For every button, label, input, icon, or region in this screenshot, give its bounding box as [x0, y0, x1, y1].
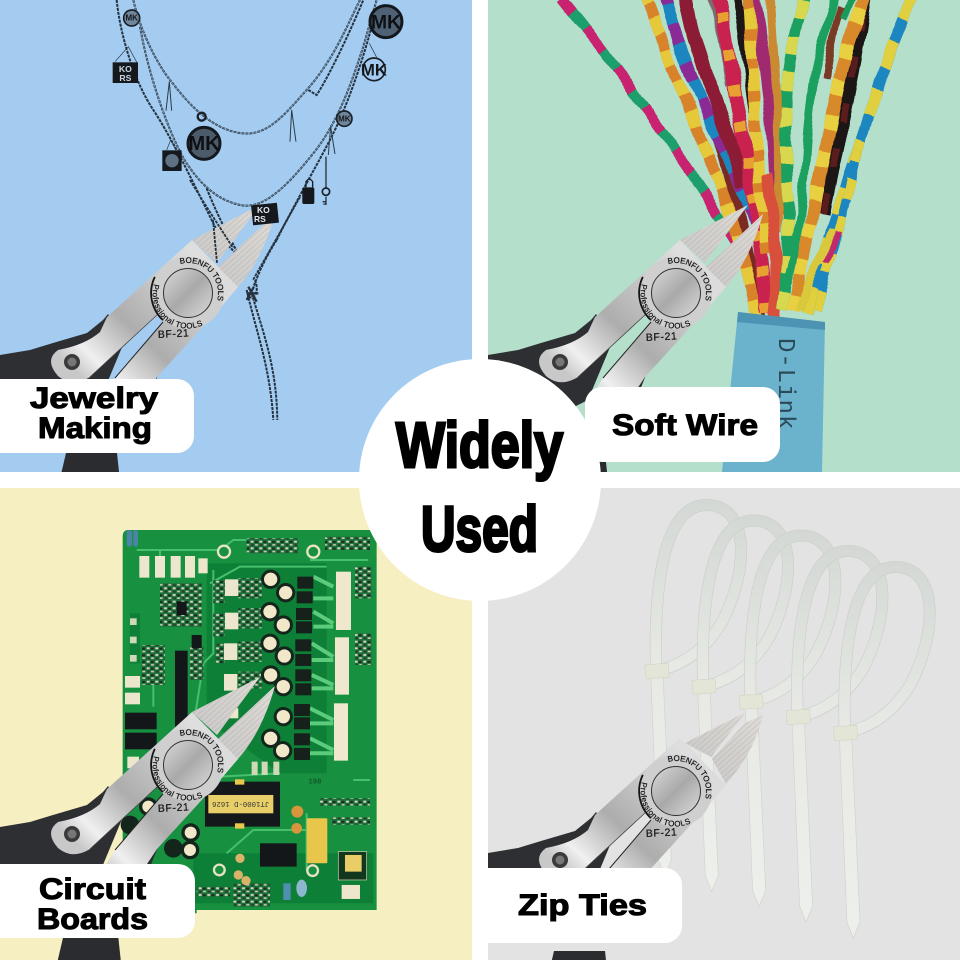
center circle heading: Widely Used: [359, 359, 601, 601]
panel: soft wire: [488, 0, 960, 472]
small resistors rows: [130, 618, 279, 775]
pliers: BF-21: [158, 801, 190, 815]
cable sheath with D-Link print: [722, 312, 825, 472]
pendant: square tag: [162, 140, 182, 171]
MOSFET transistors: [294, 577, 313, 760]
pendant: lock: [302, 179, 314, 204]
label: Soft Wire: [585, 387, 780, 462]
cable sheath with D-Link print: D-Link: [771, 338, 798, 430]
label: Circuit Boards: [0, 864, 195, 938]
pliers: BOENFU TOOLS: [180, 729, 224, 773]
center circle heading: Widely Used: Widely: [396, 409, 563, 481]
pliers: [0, 180, 301, 472]
pendant: MK ring: [361, 43, 387, 81]
label: Soft Wire: Soft Wire: [612, 409, 758, 442]
panel: zip ties: [488, 488, 960, 960]
pendant: KORS tag left: RS: [119, 73, 132, 83]
panel background blue: [0, 0, 472, 472]
label: Circuit Boards: Circuit: [39, 873, 146, 906]
pendant: small MK disc: MK: [338, 114, 351, 123]
small SMD component clusters: [142, 537, 372, 907]
label: Jewelry Making: Jewelry: [30, 382, 158, 415]
pliers: RS: [254, 214, 266, 224]
green circuit board: 198: [308, 778, 322, 786]
pendant: small MK disc: [337, 111, 352, 126]
panel background yellow: [0, 488, 472, 960]
mounting holes: [214, 546, 319, 876]
black header and relays: [125, 602, 297, 867]
transformer: [205, 779, 280, 829]
label: Jewelry Making: [0, 379, 194, 453]
pendant: KORS tag left: KO: [119, 64, 132, 74]
pendant: key: [322, 157, 330, 205]
pliers: [488, 712, 763, 960]
long terminal connectors: [334, 572, 351, 761]
pliers: BOENFU TOOLS: [180, 257, 224, 301]
pendant: tassels: [166, 82, 335, 155]
pliers: Professional TOOLS: [640, 284, 690, 329]
white connectors top-left: [125, 556, 360, 899]
label: Zip Ties: [468, 868, 682, 943]
five zip ties: [645, 505, 930, 938]
pliers: BOENFU TOOLS: [668, 257, 712, 301]
pendant: KORS tag left: [113, 47, 138, 83]
pendant: large MK circle: MK: [188, 133, 220, 155]
green circuit board: [121, 530, 377, 913]
pliers: BF-21: [646, 330, 678, 344]
panel: circuit boards: [0, 488, 472, 960]
pendant: small circle: [124, 10, 140, 26]
jewelry necklace: [113, 0, 402, 420]
label: Circuit Boards: Boards: [37, 903, 148, 936]
yellow capacitor and lower parts: [127, 530, 367, 900]
pliers: Professional TOOLS: [152, 756, 202, 801]
pliers: Professional TOOLS: [640, 782, 690, 827]
label: Jewelry Making: Making: [38, 412, 152, 445]
pliers: [488, 205, 763, 472]
transformer: JT1000-D 1626: [212, 799, 269, 807]
panel background green: [488, 0, 960, 472]
panel: jewelry making: [0, 0, 472, 472]
pliers: Professional TOOLS: [152, 284, 202, 329]
capacitors: [121, 570, 295, 859]
center circle heading: Widely Used: Used: [421, 493, 538, 565]
pendant: small circle: MK: [125, 14, 138, 23]
pendant: top right MK circle: [370, 6, 402, 38]
pliers: BOENFU TOOLS: [668, 755, 712, 799]
pliers: KO: [257, 205, 270, 215]
pliers: [0, 677, 275, 960]
label: Zip Ties: Zip Ties: [518, 889, 647, 922]
coloured twisted wires: [560, 0, 912, 317]
pendant: MK ring: MK: [361, 60, 387, 79]
pliers: BF-21: [646, 826, 678, 840]
panel background gray: [488, 488, 960, 960]
pendant: large MK circle: [188, 113, 220, 159]
pendant: top right MK circle: MK: [371, 12, 401, 33]
pliers: BF-21: [158, 327, 190, 341]
